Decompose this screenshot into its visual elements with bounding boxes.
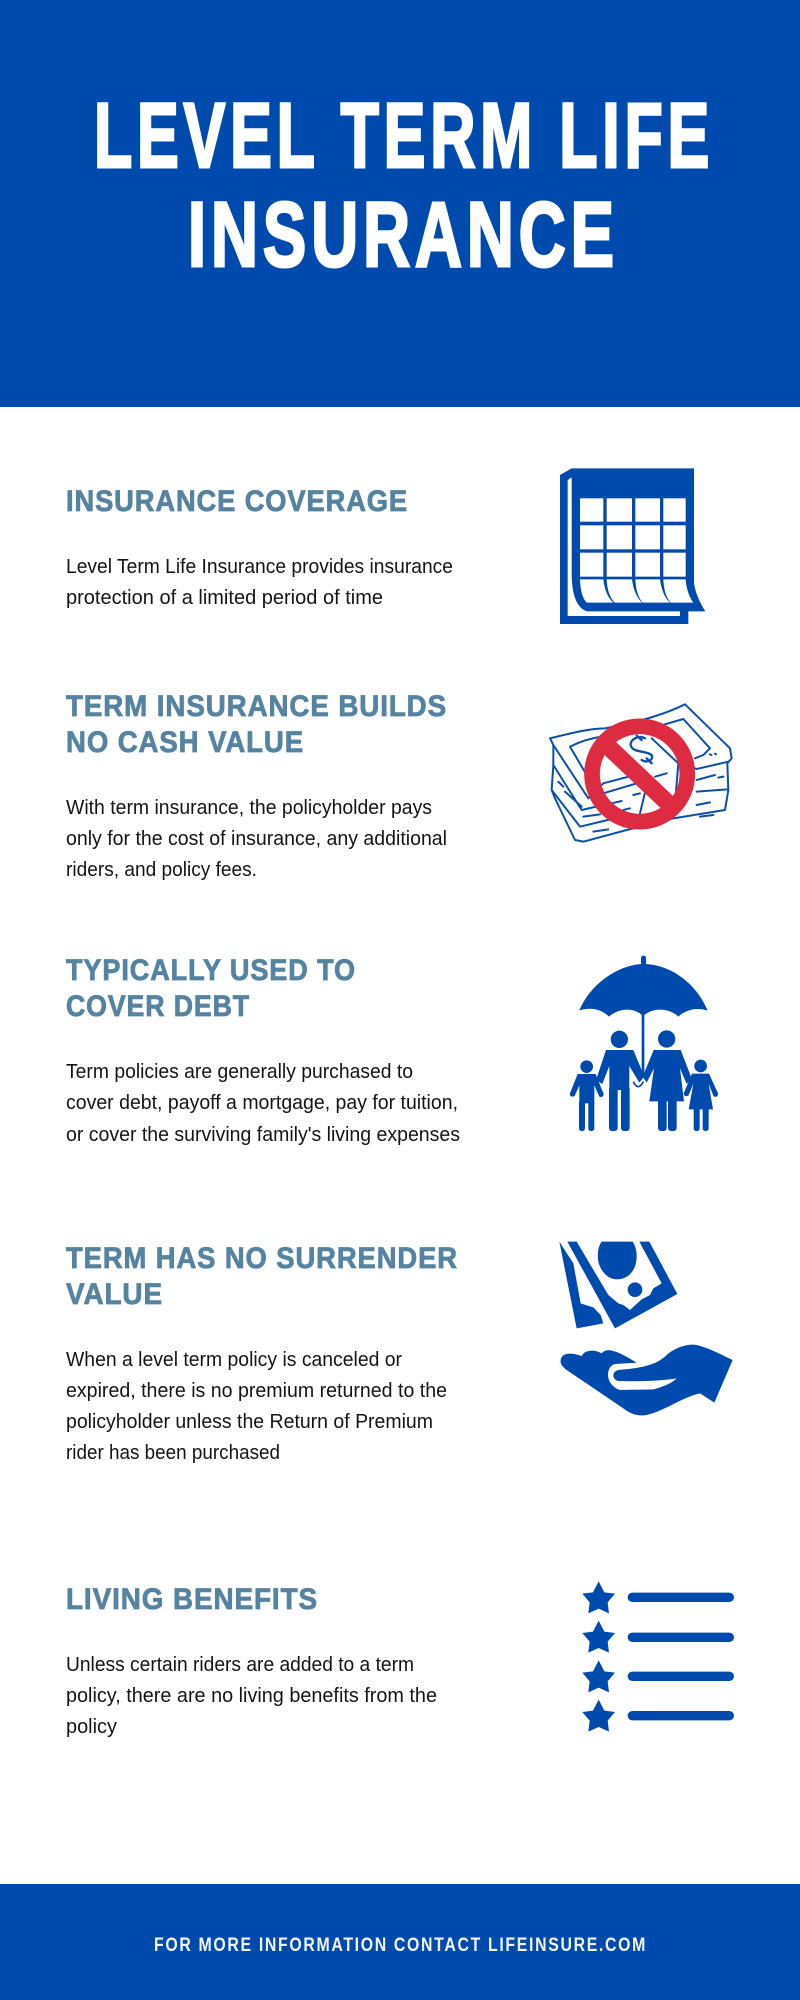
text block: policyholder unless the Return of Premium xyxy=(66,1411,433,1433)
icon: calendar xyxy=(560,468,705,624)
footer text: FOR MORE INFORMATION CONTACT LIFEINSURE.COM xyxy=(154,1935,647,1956)
text block: or cover the surviving family's living expenses xyxy=(66,1124,460,1146)
text block: expired, there is no premium returned to the xyxy=(66,1380,447,1402)
footer band xyxy=(0,1884,800,2000)
title xyxy=(94,85,714,286)
icon: cash stack with prohibition sign xyxy=(550,704,732,842)
text block xyxy=(66,1654,437,1738)
heading xyxy=(66,954,356,1023)
text block: With term insurance, the policyholder pays xyxy=(66,797,432,819)
text block: protection of a limited period of time xyxy=(66,587,383,609)
heading: INSURANCE COVERAGE xyxy=(66,485,408,518)
icon: family under umbrella xyxy=(570,956,718,1131)
text block: Level Term Life Insurance provides insurance xyxy=(66,556,453,578)
heading: TYPICALLY USED TO xyxy=(66,954,356,987)
text block: cover debt, payoff a mortgage, pay for tuition, xyxy=(66,1092,458,1114)
text block: riders, and policy fees. xyxy=(66,859,257,881)
text block: policy xyxy=(66,1716,117,1738)
heading: NO CASH VALUE xyxy=(66,726,304,759)
text block: When a level term policy is canceled or xyxy=(66,1349,402,1371)
text block: only for the cost of insurance, any additional xyxy=(66,828,447,850)
text block: Term policies are generally purchased to xyxy=(66,1061,413,1083)
section: living benefits xyxy=(66,1583,437,1738)
icon: money over open hand xyxy=(559,1242,733,1415)
text block: rider has been purchased xyxy=(66,1442,280,1464)
section: used to cover debt xyxy=(66,954,460,1146)
text block: policy, there are no living benefits from the xyxy=(66,1685,437,1707)
section: builds no cash value xyxy=(66,690,447,881)
header band with title xyxy=(0,0,800,407)
section: no surrender value xyxy=(66,1242,458,1464)
heading: VALUE xyxy=(66,1278,163,1311)
heading: COVER DEBT xyxy=(66,990,250,1023)
heading: TERM INSURANCE BUILDS xyxy=(66,690,447,723)
text block: Unless certain riders are added to a term xyxy=(66,1654,414,1676)
section: insurance coverage xyxy=(66,485,453,609)
icon: star list xyxy=(582,1581,734,1732)
text block xyxy=(66,1349,447,1464)
text block xyxy=(66,797,447,881)
heading xyxy=(66,1242,458,1311)
title: INSURANCE xyxy=(188,184,619,286)
heading: LIVING BENEFITS xyxy=(66,1583,318,1616)
heading: TERM HAS NO SURRENDER xyxy=(66,1242,458,1275)
text block xyxy=(66,1061,460,1146)
text block xyxy=(66,556,453,609)
heading xyxy=(66,690,447,759)
